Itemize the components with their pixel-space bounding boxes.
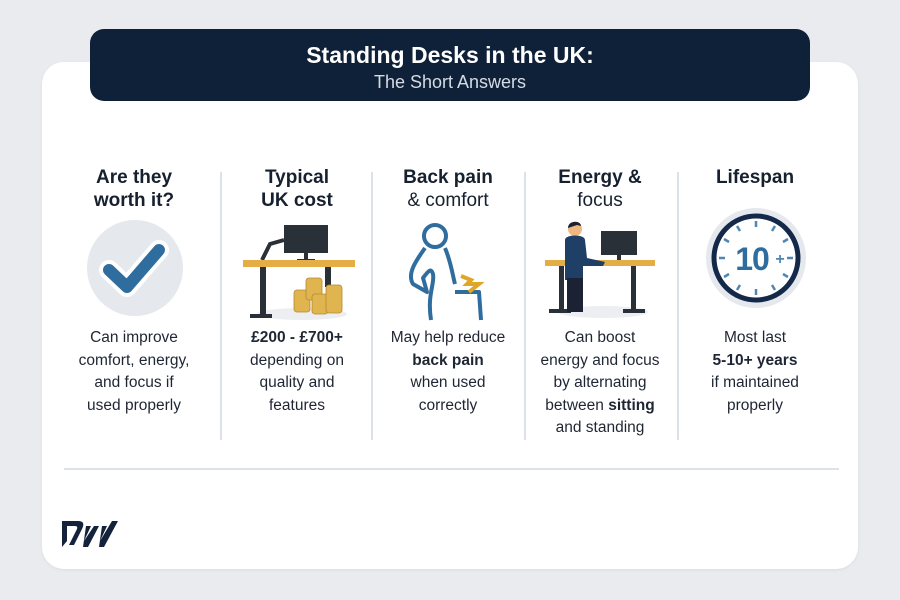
column 3 text: correctly	[419, 396, 477, 414]
column 1 text	[79, 329, 189, 414]
column 5 text: properly	[727, 396, 783, 414]
column 5 text: Most last	[724, 329, 786, 346]
column 3 heading: & comfort	[407, 190, 489, 211]
column 5 text: 5-10+ years	[713, 352, 797, 368]
column 1 heading: Are they	[96, 167, 172, 188]
column 2 text: £200 - £700+	[251, 329, 343, 346]
column 5 text: if maintained	[711, 374, 799, 391]
column 4 text: by alternating	[553, 374, 647, 391]
column 1 text: comfort, energy,	[79, 352, 189, 368]
column 2 heading: Typical	[265, 167, 329, 188]
column 3 text: May help reduce	[391, 329, 505, 346]
icon: back pain	[408, 223, 485, 320]
column 1 text: Can improve	[90, 329, 178, 346]
column 3 heading: Back pain	[403, 167, 493, 188]
column 3 text	[391, 329, 505, 414]
subtitle: The Short Answers	[374, 72, 526, 92]
column 1 text: used properly	[87, 396, 181, 414]
column 4 heading: focus	[577, 190, 623, 211]
column 2 text: depending on	[250, 352, 344, 368]
icon: clock 10+: +	[775, 251, 785, 268]
column 1 text: and focus if	[94, 374, 174, 391]
column 5 heading: Lifespan	[716, 167, 794, 188]
column 2 text	[250, 329, 344, 414]
column 4 text	[541, 329, 659, 436]
column 4 text: and standing	[556, 419, 644, 436]
icon: person at desk	[545, 222, 655, 318]
icon: clock 10+	[706, 208, 806, 308]
column 5 text	[711, 329, 799, 414]
column 2 heading: UK cost	[261, 190, 333, 211]
column 4 heading	[558, 167, 642, 211]
icon: desk with coins	[243, 225, 355, 320]
column 4 text: between sitting	[545, 396, 655, 414]
column 3 text: when used	[410, 374, 485, 391]
column 3 heading	[403, 167, 493, 211]
column 4 text: energy and focus	[541, 352, 659, 368]
column 4 text: Can boost	[565, 329, 635, 346]
column 2 heading	[261, 167, 333, 211]
logo	[62, 521, 118, 547]
title: Standing Desks in the UK:	[306, 42, 594, 68]
column 1 heading	[94, 167, 174, 211]
card	[42, 62, 858, 569]
column 2 text: quality and	[260, 374, 334, 391]
column 1 heading: worth it?	[94, 190, 174, 211]
column 2 text: features	[269, 396, 325, 414]
column 3 text: back pain	[412, 352, 484, 368]
title banner	[90, 29, 810, 101]
column 4 heading: Energy &	[558, 167, 642, 188]
icon: clock 10+: 10	[735, 241, 769, 277]
icon: check	[87, 220, 183, 316]
